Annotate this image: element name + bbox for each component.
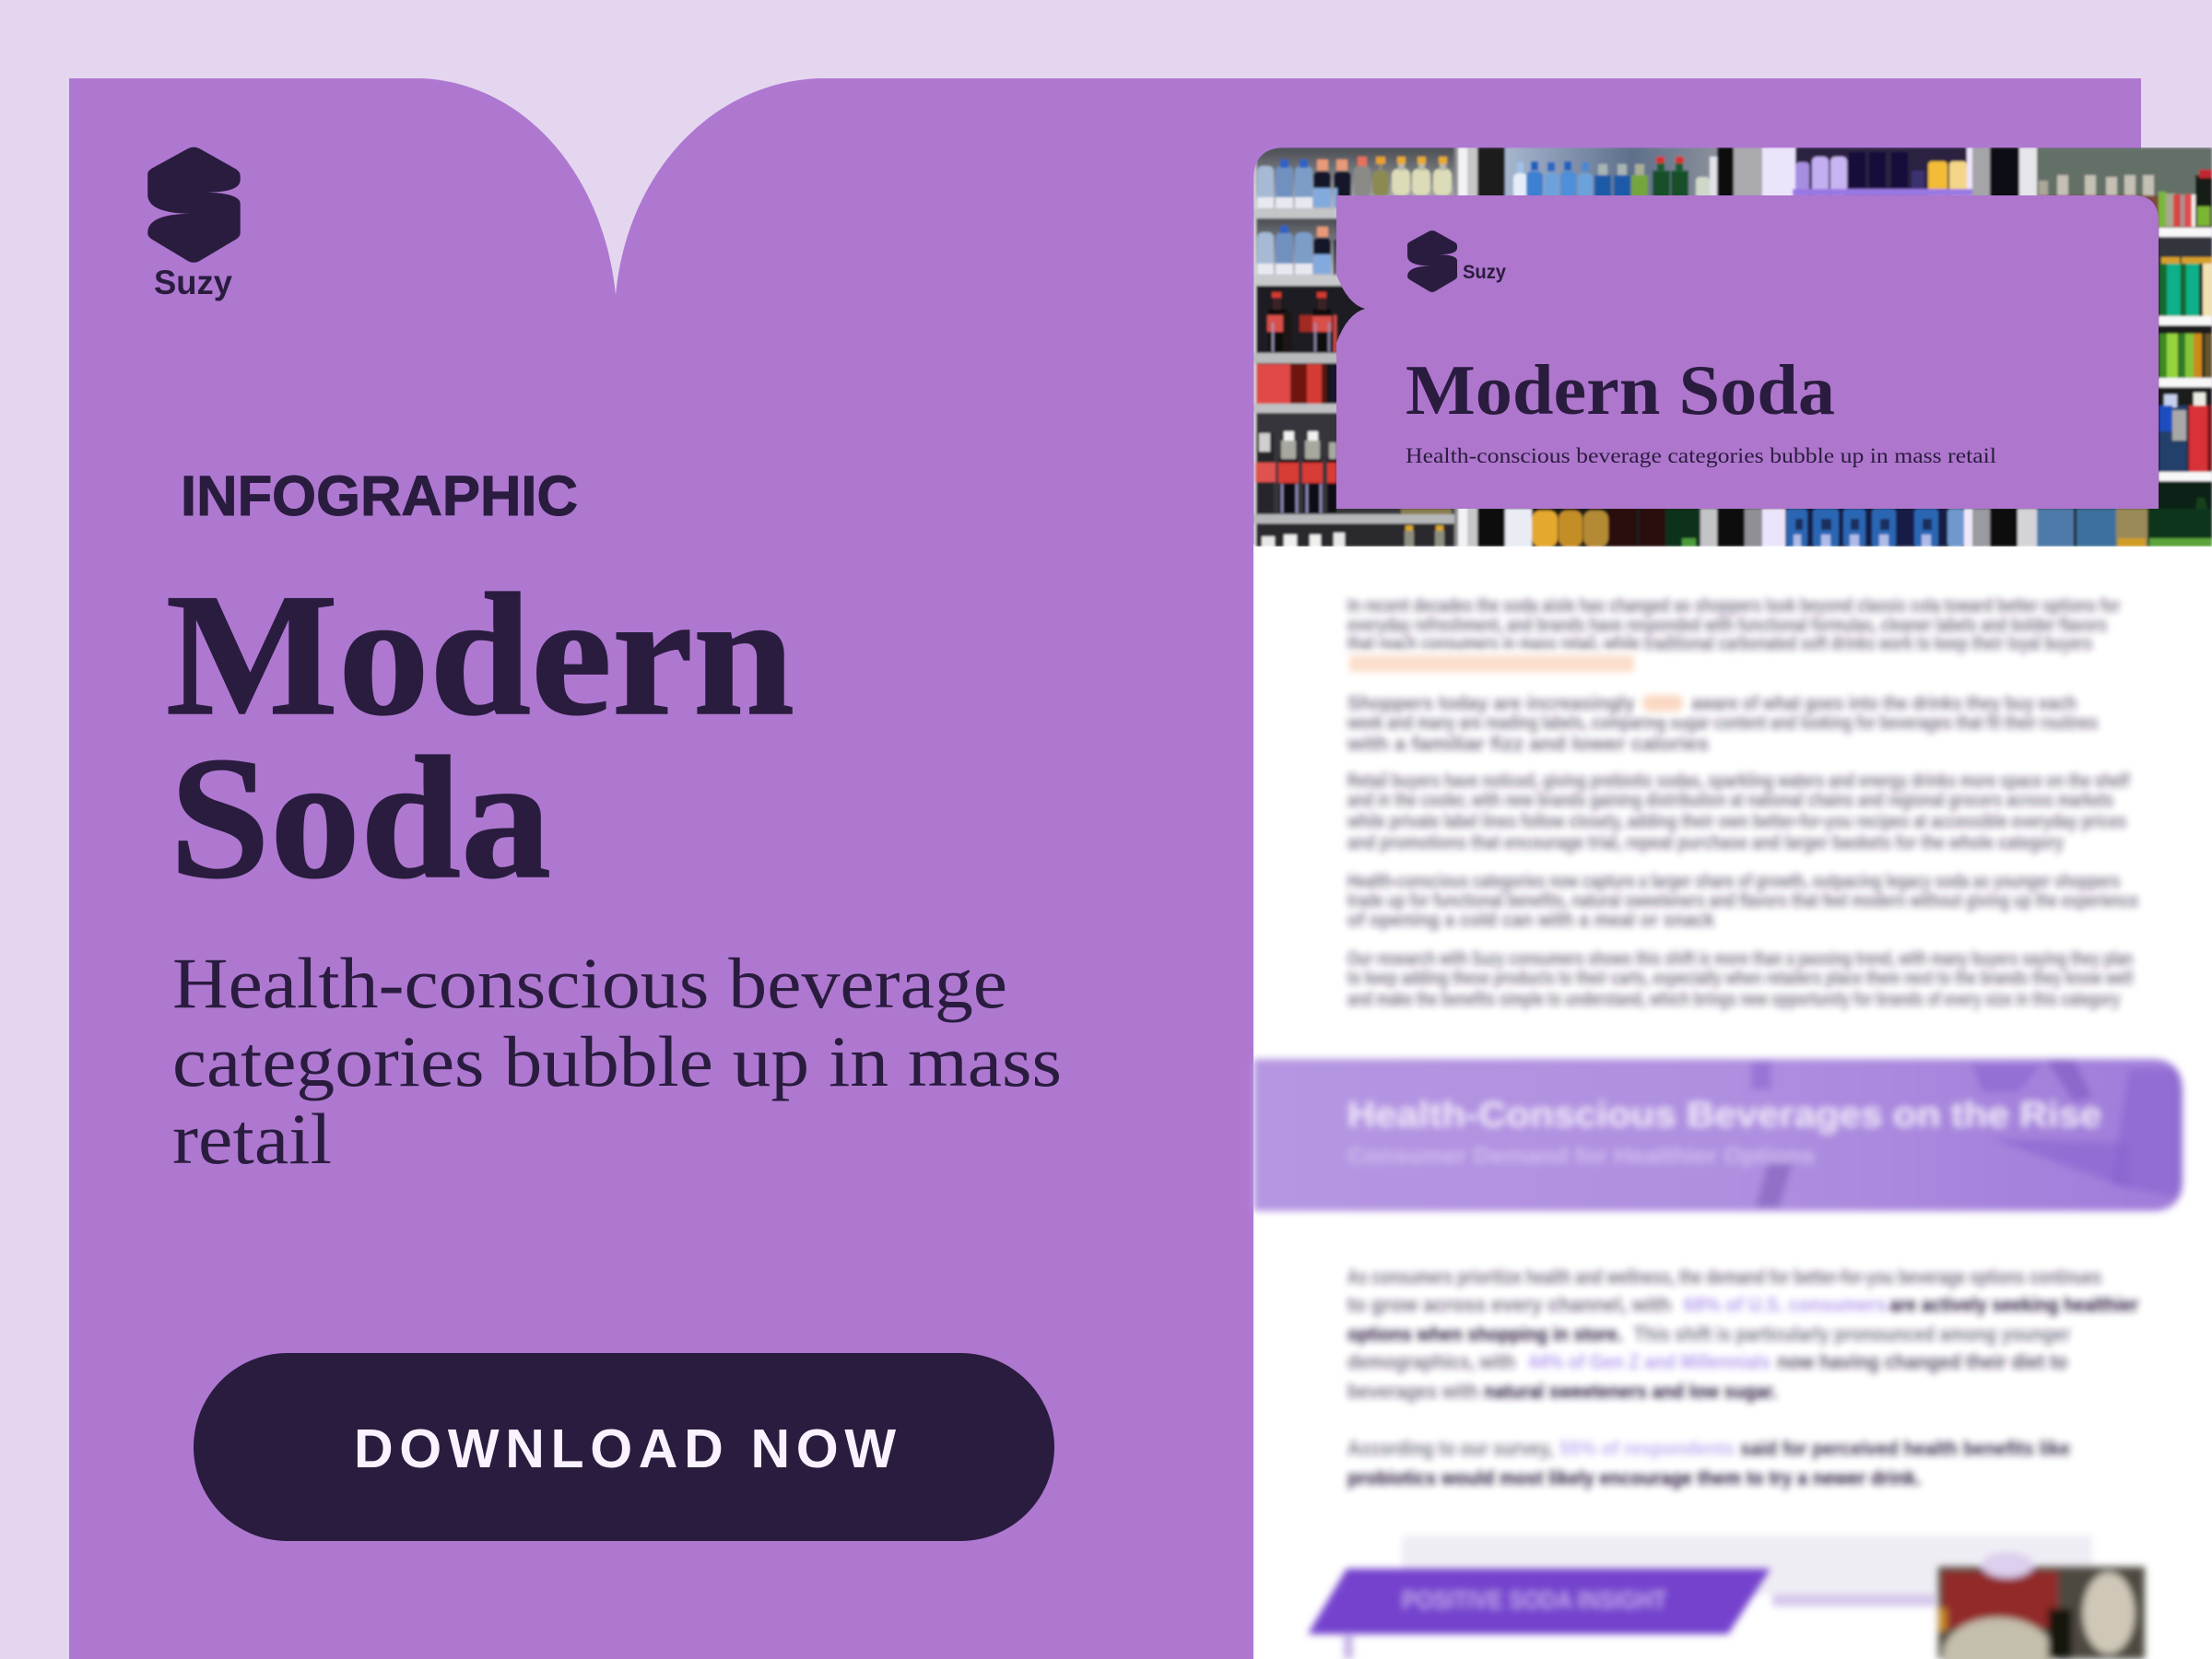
- text block: blurred findings paragraphs: now having changed their diet to: [1777, 1350, 2067, 1373]
- left rows: water and syrup: [1257, 157, 1452, 275]
- top strip: fridge four: [2037, 147, 2212, 228]
- text block: blurred intro paragraphs: and promotions that encourage trial, repeat purchase and larger baskets for the whole category: [1347, 832, 2064, 853]
- button: download now: DOWNLOAD NOW: [354, 1418, 896, 1479]
- photo: drinks fridge shelves: [1253, 147, 2212, 547]
- section banner: health-conscious beverages: [1253, 1059, 2183, 1211]
- mini logo wordmark: Suzy: [1463, 262, 1506, 283]
- top strip: fridge three: [1717, 147, 2037, 198]
- text block: blurred findings paragraphs: demographics, with: [1347, 1350, 1515, 1373]
- subtitle: Health-conscious beverage: [172, 943, 1007, 1023]
- text block: blurred findings paragraphs: are actively seeking healthier: [1889, 1293, 2138, 1316]
- insight tag: [1308, 1569, 1771, 1634]
- text block: blurred findings paragraphs: 68% of U.S. consumers: [1684, 1293, 1887, 1316]
- panel: report cover card: [1336, 195, 2159, 509]
- banner heading: Health-Conscious Beverages on the Rise: [1347, 1096, 2101, 1135]
- subtitle: categories bubble up in mass: [172, 1021, 1062, 1101]
- subtitle: retail: [172, 1099, 332, 1179]
- eyebrow label: INFOGRAPHIC: [181, 465, 578, 527]
- title: [166, 559, 794, 915]
- text block: blurred findings paragraphs: said for perceived health benefits like: [1740, 1437, 2070, 1460]
- text block: blurred findings paragraphs: This shift is particularly pronounced among younger: [1634, 1323, 2070, 1346]
- text block: blurred findings paragraphs: 55% of respondents: [1559, 1437, 1735, 1460]
- banner photo streaks: [1751, 1060, 2183, 1207]
- text block: blurred findings paragraphs: According to our survey,: [1347, 1437, 1553, 1460]
- title: Modern: [166, 559, 794, 752]
- text block: blurred findings paragraphs: 44% of Gen Z and Millennials: [1528, 1350, 1771, 1373]
- text block: blurred intro paragraphs: Shoppers today are increasingly: [1347, 693, 1635, 714]
- text block: blurred intro paragraphs: aware of what goes into the drinks they buy each: [1691, 693, 2077, 714]
- icon: mini Suzy logo: [1407, 230, 1457, 292]
- text block: blurred findings paragraphs: options when shopping in store.: [1347, 1323, 1622, 1346]
- panel: report preview page: [1253, 544, 2212, 1659]
- banner subheading: Consumer Demand for Healthier Options: [1347, 1144, 1815, 1169]
- top strip: fridge two: [1505, 147, 1717, 198]
- text block: blurred findings paragraphs: probiotics would most likely encourage them to try a newer drink.: [1347, 1466, 1921, 1489]
- text block: blurred findings paragraphs: beverages with: [1347, 1380, 1478, 1403]
- insight tag: POSITIVE SODA INSIGHT: [1402, 1586, 1666, 1614]
- report subtitle: Health-conscious beverage categories bubble up in mass retail: [1406, 444, 1997, 468]
- right rows: shelves and bottles: [2159, 228, 2212, 547]
- text block: blurred intro paragraphs: of opening a cold can with a meal or snack: [1347, 910, 1714, 931]
- report title: Modern Soda: [1406, 350, 1835, 429]
- title: Soda: [170, 722, 551, 915]
- text block: blurred findings paragraphs: natural sweeteners and low sugar.: [1484, 1380, 1777, 1403]
- text block: blurred findings paragraphs: [1347, 1265, 2138, 1489]
- left rows: cola bottles and cans: [1255, 292, 1452, 547]
- photo: food thumbnail: [1938, 1552, 2145, 1659]
- icon: Suzy logo: [147, 147, 241, 301]
- button: download now: [194, 1353, 1054, 1541]
- text block: blurred intro paragraphs: with a familiar fizz and lower calories: [1347, 734, 1709, 755]
- bottom strip bottles: [1478, 509, 2212, 547]
- insight callout backdrop: [1344, 1535, 2092, 1659]
- subtitle: [172, 943, 1062, 1179]
- icon: Suzy logo: Suzy: [154, 264, 232, 301]
- text block: blurred findings paragraphs: to grow across every channel, with: [1347, 1293, 1671, 1316]
- text block: blurred intro paragraphs: [1347, 595, 2138, 1010]
